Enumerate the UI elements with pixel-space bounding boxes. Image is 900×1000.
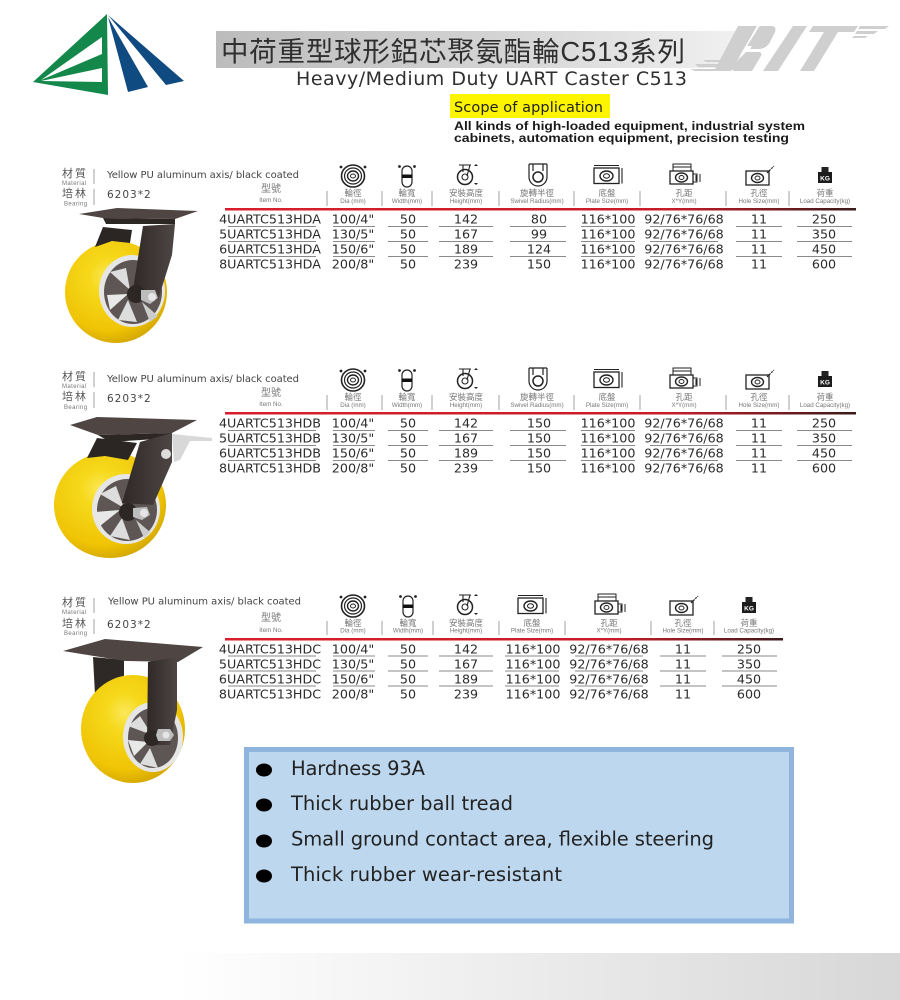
row 8UARTC513HDB: 50 <box>400 460 416 476</box>
row 8UARTC513HDC: 92/76*76/68 <box>569 686 649 702</box>
scope description: cabinets, automation equipment, precision testing <box>454 131 789 145</box>
row 5UARTC513HDC: 92/76*76/68 <box>569 656 649 672</box>
row 8UARTC513HDA: 116*100 <box>581 256 635 272</box>
row 4UARTC513HDA: 50 <box>400 212 416 226</box>
row 5UARTC513HDA: 50 <box>400 226 416 242</box>
row 6UARTC513HDB: 189 <box>454 446 478 460</box>
row 4UARTC513HDC <box>219 642 761 656</box>
column headers: 孔距 <box>675 188 693 198</box>
row 5UARTC513HDB <box>219 430 836 446</box>
material and bearing info <box>62 369 299 411</box>
row 5UARTC513HDC: 116*100 <box>506 656 560 672</box>
HIT watermark logo <box>690 26 889 71</box>
row 6UARTC513HDA: 92/76*76/68 <box>644 242 724 256</box>
feature: wear resistance: Thick rubber wear-resistant <box>290 863 562 886</box>
row 6UARTC513HDB: 116*100 <box>581 446 635 460</box>
column headers: 輪寬 <box>399 618 417 628</box>
feature: ball tread: Thick rubber ball tread <box>290 792 513 815</box>
row 8UARTC513HDA: 92/76*76/68 <box>644 256 724 272</box>
column headers: Hole Size(mm) <box>739 402 779 409</box>
feature: hardness: Hardness 93A <box>291 757 426 780</box>
row 6UARTC513HDB: 92/76*76/68 <box>644 446 724 460</box>
column headers: 荷重 <box>816 392 834 402</box>
row 4UARTC513HDC: 100/4" <box>332 642 374 656</box>
row 8UARTC513HDB: 600 <box>812 460 836 476</box>
row 6UARTC513HDC: 92/76*76/68 <box>569 672 649 686</box>
row 8UARTC513HDA: 200/8" <box>332 256 374 272</box>
column headers: 安裝高度 <box>449 188 483 198</box>
scope description <box>454 119 805 145</box>
row 5UARTC513HDC: 167 <box>454 656 478 672</box>
table: HDA specifications <box>219 164 856 272</box>
column headers: Plate Size(mm) <box>511 628 553 634</box>
scope of application label: Scope of application <box>454 100 603 116</box>
row 5UARTC513HDA: 11 <box>751 226 767 242</box>
row 5UARTC513HDC: 11 <box>675 656 691 672</box>
column headers: Width(mm) <box>392 198 422 205</box>
row 6UARTC513HDA: 450 <box>812 242 836 256</box>
row 8UARTC513HDC: 50 <box>400 686 416 702</box>
row 6UARTC513HDC: 116*100 <box>506 672 560 686</box>
row 8UARTC513HDC: 200/8" <box>332 686 374 702</box>
row 4UARTC513HDC: 142 <box>454 642 478 656</box>
material and bearing info: Bearing <box>64 405 87 411</box>
material and bearing info: 培林 <box>62 186 88 200</box>
column headers: Plate Size(mm) <box>586 402 628 409</box>
row 8UARTC513HDB: 239 <box>454 460 478 476</box>
column headers: 旋轉半徑 <box>520 188 554 198</box>
title band <box>216 31 740 68</box>
material and bearing info: 6203*2 <box>107 393 152 405</box>
column headers: 孔徑 <box>674 618 692 628</box>
row 5UARTC513HDC: 350 <box>737 656 761 672</box>
scope of application label <box>450 94 610 118</box>
column headers: 底盤 <box>523 618 541 628</box>
column headers: 孔距 <box>675 392 693 402</box>
column headers: X*Y(mm) <box>596 628 622 634</box>
row 4UARTC513HDA: 250 <box>812 212 836 226</box>
row 6UARTC513HDA: 189 <box>454 242 478 256</box>
row 4UARTC513HDB: 116*100 <box>581 416 635 430</box>
material and bearing info: Material <box>62 610 87 616</box>
column headers: 孔距 <box>600 618 618 628</box>
column headers: Height(mm) <box>450 628 482 634</box>
row 6UARTC513HDB: 11 <box>751 446 767 460</box>
column headers: Load Capacity(kg) <box>724 628 774 634</box>
column headers <box>259 368 850 410</box>
column headers: Hole Size(mm) <box>663 628 703 634</box>
row 8UARTC513HDA: 150 <box>527 256 551 272</box>
subtitle: English: Heavy/Medium Duty UART Caster C513 <box>296 68 687 90</box>
row 5UARTC513HDA <box>219 226 836 242</box>
photo: swivel caster with brake <box>54 417 212 558</box>
column headers: 輪徑 <box>344 618 362 628</box>
column headers <box>259 164 850 206</box>
row 6UARTC513HDA: 150/6" <box>332 242 374 256</box>
column headers: 安裝高度 <box>449 392 483 402</box>
column headers: Height(mm) <box>450 198 482 205</box>
column headers: Width(mm) <box>393 628 423 634</box>
column headers: X*Y(mm) <box>671 198 697 205</box>
row 5UARTC513HDA: 92/76*76/68 <box>644 226 724 242</box>
column headers: Dia (mm) <box>340 628 366 634</box>
row 5UARTC513HDB: 5UARTC513HDB <box>219 430 321 446</box>
row 8UARTC513HDB: 150 <box>527 460 551 476</box>
row 6UARTC513HDC: 11 <box>675 672 691 686</box>
column headers: Width(mm) <box>392 402 422 409</box>
row 6UARTC513HDC: 450 <box>737 672 761 686</box>
material and bearing info: 材質 <box>62 166 88 180</box>
material and bearing info: Material <box>62 384 87 390</box>
row 6UARTC513HDA: 50 <box>400 242 416 256</box>
row 8UARTC513HDB <box>219 460 836 476</box>
column headers: 輪寬 <box>398 392 416 402</box>
panel: C513 HDB swivel caster with brake <box>54 368 856 558</box>
material and bearing info: 培林 <box>62 616 88 630</box>
row 4UARTC513HDC: 4UARTC513HDC <box>219 642 321 656</box>
row 8UARTC513HDA: 50 <box>400 256 416 272</box>
column headers: Load Capacity(kg) <box>800 402 850 409</box>
title: Chinese: 中荷重型球形鋁芯聚氨酯輪C513系列 <box>221 36 685 67</box>
panel: product features <box>246 750 792 921</box>
photo: rigid caster <box>63 639 203 783</box>
row 6UARTC513HDC <box>219 672 761 686</box>
logo: triangular company mark <box>33 14 184 95</box>
row 4UARTC513HDA: 4UARTC513HDA <box>219 212 321 226</box>
column headers: 荷重 <box>816 188 834 198</box>
row 4UARTC513HDB <box>219 416 836 430</box>
row 5UARTC513HDB: 130/5" <box>332 430 374 446</box>
row 5UARTC513HDB: 350 <box>812 430 836 446</box>
column headers: 輪徑 <box>344 188 362 198</box>
row 8UARTC513HDC <box>219 686 761 702</box>
row 5UARTC513HDB: 167 <box>454 430 478 446</box>
column headers: 孔徑 <box>750 188 768 198</box>
row 5UARTC513HDC: 5UARTC513HDC <box>219 656 321 672</box>
photo: swivel caster <box>65 208 198 343</box>
row 8UARTC513HDC: 600 <box>737 686 761 702</box>
row 4UARTC513HDC: 92/76*76/68 <box>569 642 649 656</box>
row 6UARTC513HDC: 6UARTC513HDC <box>219 672 321 686</box>
row 8UARTC513HDC: 11 <box>675 686 691 702</box>
column headers: Item No. <box>259 401 283 408</box>
column headers: Dia (mm) <box>340 402 366 409</box>
column headers: Height(mm) <box>450 402 482 409</box>
row 8UARTC513HDA: 600 <box>812 256 836 272</box>
row 5UARTC513HDA: 116*100 <box>581 226 635 242</box>
column headers: 輪寬 <box>398 188 416 198</box>
row 5UARTC513HDB: 50 <box>400 430 416 446</box>
row 4UARTC513HDA: 80 <box>531 212 547 226</box>
row 4UARTC513HDB: 92/76*76/68 <box>644 416 724 430</box>
column headers: 安裝高度 <box>449 618 483 628</box>
material and bearing info <box>62 595 301 637</box>
column headers: 型號 <box>261 386 281 399</box>
row 8UARTC513HDA: 11 <box>751 256 767 272</box>
column headers: 孔徑 <box>750 392 768 402</box>
panel: C513 HDC rigid caster <box>62 594 783 783</box>
row 6UARTC513HDB <box>219 446 836 460</box>
material and bearing info: 材質 <box>62 369 88 383</box>
material and bearing info: 6203*2 <box>107 189 152 201</box>
row 8UARTC513HDC: 116*100 <box>506 686 560 702</box>
row 6UARTC513HDC: 189 <box>454 672 478 686</box>
column headers: Load Capacity(kg) <box>800 198 850 205</box>
row 5UARTC513HDB: 116*100 <box>581 430 635 446</box>
row 8UARTC513HDA: 8UARTC513HDA <box>219 256 321 272</box>
row 8UARTC513HDC: 239 <box>454 686 478 702</box>
row 8UARTC513HDB: 8UARTC513HDB <box>219 460 321 476</box>
row 8UARTC513HDB: 116*100 <box>581 460 635 476</box>
scope description: All kinds of high-loaded equipment, industrial system <box>454 119 805 133</box>
row 4UARTC513HDA: 100/4" <box>332 212 374 226</box>
material and bearing info: 6203*2 <box>107 619 152 631</box>
row 4UARTC513HDB: 11 <box>751 416 767 430</box>
row 6UARTC513HDA <box>219 242 836 256</box>
row 4UARTC513HDC: 116*100 <box>506 642 560 656</box>
material and bearing info: 材質 <box>62 595 88 609</box>
feature: steering: Small ground contact area, flexible steering <box>291 828 714 850</box>
row 5UARTC513HDA: 350 <box>812 226 836 242</box>
row 4UARTC513HDC: 250 <box>737 642 761 656</box>
row 6UARTC513HDB: 6UARTC513HDB <box>219 446 321 460</box>
row 6UARTC513HDC: 50 <box>400 672 416 686</box>
row 5UARTC513HDC: 130/5" <box>332 656 374 672</box>
row 6UARTC513HDB: 50 <box>400 446 416 460</box>
column headers: Dia (mm) <box>340 198 366 205</box>
row 8UARTC513HDC: 8UARTC513HDC <box>219 686 321 702</box>
column headers: Plate Size(mm) <box>586 198 628 205</box>
material and bearing info: Bearing <box>64 631 87 637</box>
row 8UARTC513HDB: 200/8" <box>332 460 374 476</box>
column headers: Item No. <box>259 197 283 204</box>
row 4UARTC513HDB: 150 <box>527 416 551 430</box>
row 4UARTC513HDB: 50 <box>400 416 416 430</box>
row 4UARTC513HDB: 142 <box>454 416 478 430</box>
material and bearing info: Yellow PU aluminum axis/ black coated <box>106 374 299 385</box>
row 4UARTC513HDB: 4UARTC513HDB <box>219 416 321 430</box>
column headers: 底盤 <box>598 392 616 402</box>
footer gradient band <box>0 953 900 1000</box>
row 8UARTC513HDA: 239 <box>454 256 478 272</box>
material and bearing info: Yellow PU aluminum axis/ black coated <box>107 596 301 608</box>
row 6UARTC513HDB: 450 <box>812 446 836 460</box>
row 5UARTC513HDB: 92/76*76/68 <box>644 430 724 446</box>
row 5UARTC513HDA: 130/5" <box>332 226 374 242</box>
row 6UARTC513HDA: 124 <box>527 242 551 256</box>
column headers: 輪徑 <box>344 392 362 402</box>
row 4UARTC513HDA: 11 <box>751 212 767 226</box>
row 8UARTC513HDB: 92/76*76/68 <box>644 460 724 476</box>
row 5UARTC513HDA: 5UARTC513HDA <box>219 226 321 242</box>
row 6UARTC513HDC: 150/6" <box>332 672 374 686</box>
row 5UARTC513HDB: 11 <box>751 430 767 446</box>
material and bearing info: Yellow PU aluminum axis/ black coated <box>106 170 299 181</box>
row 6UARTC513HDA: 6UARTC513HDA <box>219 242 321 256</box>
column headers: 型號 <box>261 611 281 624</box>
table: HDC specifications <box>219 594 783 702</box>
row 5UARTC513HDC <box>219 656 761 672</box>
column headers: X*Y(mm) <box>671 402 697 409</box>
material and bearing info: Bearing <box>64 202 87 208</box>
row 4UARTC513HDA: 92/76*76/68 <box>644 212 724 226</box>
row 5UARTC513HDA: 99 <box>531 226 547 242</box>
table: HDB specifications <box>219 368 856 476</box>
row 6UARTC513HDA: 116*100 <box>581 242 635 256</box>
panel: C513 HDA swivel caster <box>62 164 856 343</box>
material and bearing info: 培林 <box>62 389 88 403</box>
row 6UARTC513HDA: 11 <box>751 242 767 256</box>
row 4UARTC513HDC: 50 <box>400 642 416 656</box>
material and bearing info <box>62 166 299 208</box>
column headers: 型號 <box>261 182 281 195</box>
row 4UARTC513HDC: 11 <box>675 642 691 656</box>
column headers: Swivel Radius(mm) <box>510 402 564 409</box>
column headers: 旋轉半徑 <box>520 392 554 402</box>
row 5UARTC513HDC: 50 <box>400 656 416 672</box>
row 6UARTC513HDB: 150 <box>527 446 551 460</box>
column headers: Hole Size(mm) <box>739 198 779 205</box>
row 8UARTC513HDA <box>219 256 836 272</box>
row 8UARTC513HDB: 11 <box>751 460 767 476</box>
material and bearing info: Material <box>62 181 87 187</box>
row 5UARTC513HDA: 167 <box>454 226 478 242</box>
row 4UARTC513HDA: 116*100 <box>581 212 635 226</box>
column headers: Swivel Radius(mm) <box>510 198 564 205</box>
row 4UARTC513HDB: 250 <box>812 416 836 430</box>
column headers <box>259 594 774 635</box>
row 5UARTC513HDB: 150 <box>527 430 551 446</box>
column headers: 底盤 <box>598 188 616 198</box>
row 6UARTC513HDB: 150/6" <box>332 446 374 460</box>
row 4UARTC513HDB: 100/4" <box>332 416 374 430</box>
row 4UARTC513HDA: 142 <box>454 212 478 226</box>
column headers: 荷重 <box>740 618 758 628</box>
column headers: Item No. <box>259 627 283 634</box>
row 4UARTC513HDA <box>219 212 836 226</box>
